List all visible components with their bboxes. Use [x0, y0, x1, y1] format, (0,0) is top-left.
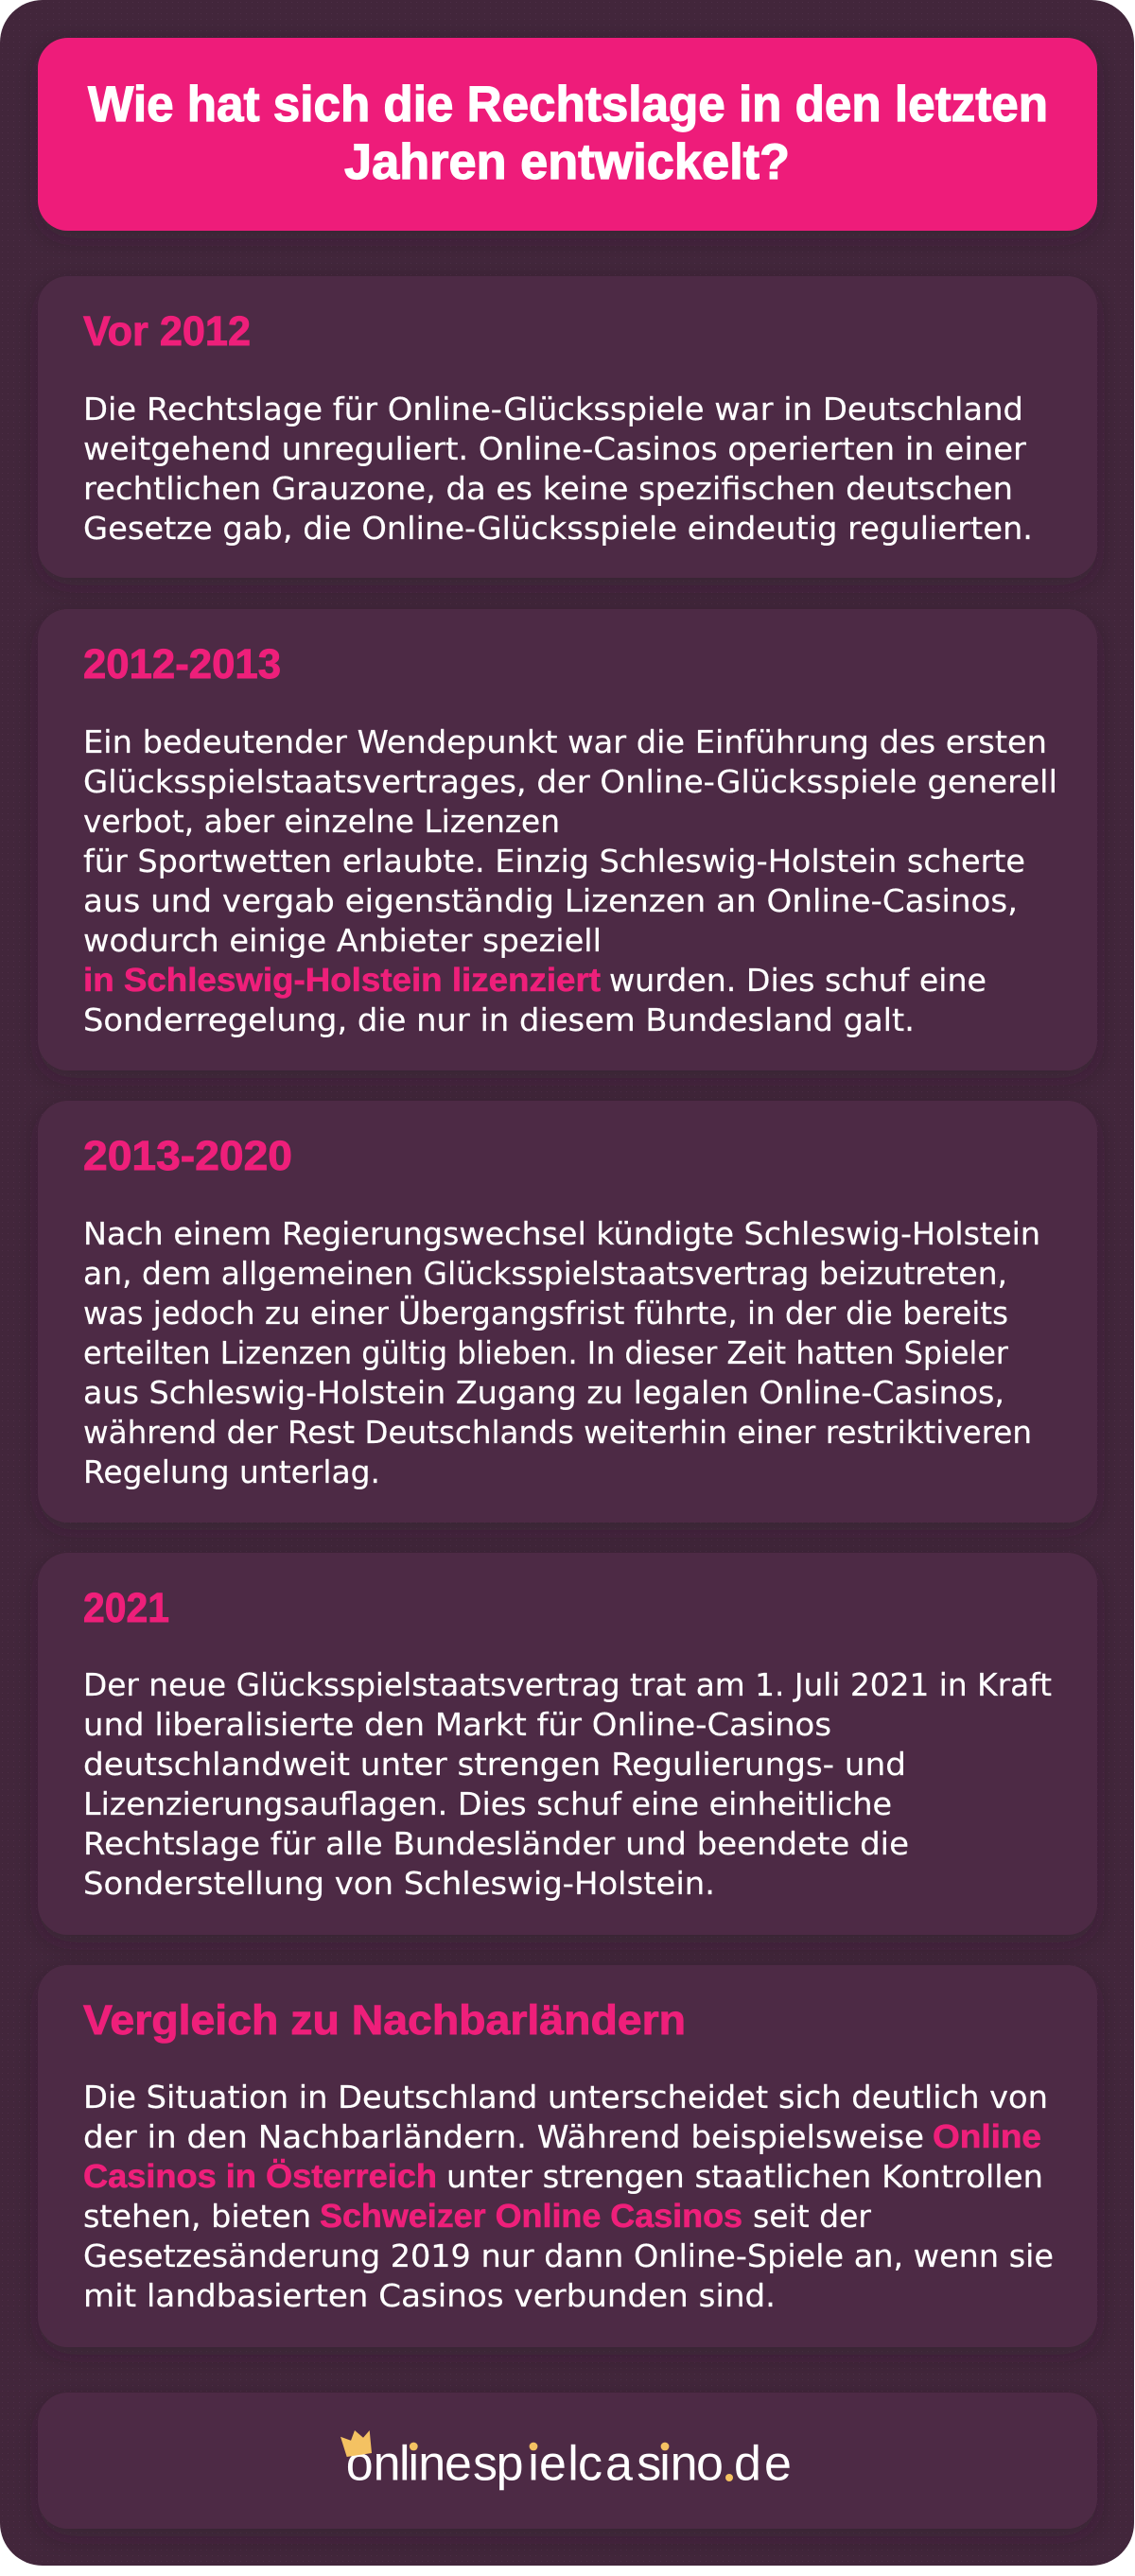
heading: Vergleich zu Nachbarländern: Vergleich zu Nachbarländern	[83, 1997, 686, 2044]
body text: 2013-2020	[83, 1215, 1040, 1490]
body text: Vor 2012: rechtlichen Grauzone, da es keine spezifischen deutschen	[83, 470, 1013, 507]
body text: 2012-2013	[83, 723, 1057, 1038]
title text: Jahren entwickelt?	[344, 134, 790, 190]
panel: 2012-2013	[38, 609, 1097, 1070]
body text: 2021: Sonderstellung von Schleswig-Holstein.	[83, 1865, 715, 1902]
body text: Vergleich zu Nachbarländern: Die Situation in Deutschland unterscheidet sich deutlich von	[83, 2079, 1048, 2115]
body text: 2012-2013: aus und vergab eigenständig Lizenzen an Online-Casinos,	[83, 882, 1018, 919]
body text: Vergleich zu Nachbarländern: unter strengen staatlichen Kontrollen	[446, 2158, 1043, 2195]
body text: Vergleich zu Nachbarländern: Gesetzesänderung 2019 nur dann Online-Spiele an, wenn sie	[83, 2237, 1054, 2274]
body text: Vergleich zu Nachbarländern: stehen, bieten	[83, 2198, 311, 2235]
heading: 2013-2020: 2013-2020	[83, 1133, 292, 1179]
body text: 2013-2020: an, dem allgemeinen Glücksspielstaatsvertrag beizutreten,	[83, 1255, 1007, 1292]
heading: Vor 2012: Vor 2012	[83, 308, 251, 355]
body text: 2013-2020: was jedoch zu einer Übergangsfrist führte, in der die bereits	[83, 1295, 1008, 1332]
title banner	[38, 38, 1097, 231]
title text: Wie hat sich die Rechtslage in den letzten	[88, 77, 1048, 132]
body text: 2012-2013: für Sportwetten erlaubte. Einzig Schleswig-Holstein scherte	[83, 843, 1025, 879]
body text: Vergleich zu Nachbarländern	[83, 2079, 1054, 2314]
body text: 2021: deutschlandweit unter strengen Regulierungs- und	[83, 1746, 906, 1783]
body text: 2021: Lizenzierungsauflagen. Dies schuf eine einheitliche	[83, 1785, 892, 1822]
body text: Vor 2012	[83, 391, 1033, 547]
body text: 2013-2020: während der Rest Deutschlands weiterhin einer restriktiveren	[83, 1414, 1032, 1451]
body text: 2012-2013: Sonderregelung, die nur in diesem Bundesland galt.	[83, 1001, 915, 1038]
body text: 2021	[83, 1666, 1052, 1902]
body text: 2012-2013: in Schleswig-Holstein lizenziert	[83, 962, 601, 999]
title text	[88, 77, 1048, 190]
panel: 2021	[38, 1553, 1097, 1935]
body text: Vor 2012: Gesetze gab, die Online-Glücksspiele eindeutig regulierten.	[83, 510, 1033, 547]
heading: 2021: 2021	[83, 1585, 169, 1631]
body text: Vergleich zu Nachbarländern: mit landbasierten Casinos verbunden sind.	[83, 2277, 776, 2314]
body text: 2012-2013: wurden. Dies schuf eine	[609, 962, 987, 999]
logo wordmark: onlinespielcasino.de	[346, 2436, 792, 2491]
panel: logo footer	[38, 2393, 1097, 2529]
body text: 2013-2020: aus Schleswig-Holstein Zugang zu legalen Online-Casinos,	[83, 1374, 1004, 1411]
body text: Vergleich zu Nachbarländern: seit der	[753, 2198, 871, 2235]
body text: Vergleich zu Nachbarländern: Schweizer Online Casinos	[320, 2198, 742, 2235]
panel: Vor 2012	[38, 276, 1097, 578]
body text: 2021: Rechtslage für alle Bundesländer und beendete die	[83, 1825, 909, 1862]
body text: Vor 2012: weitgehend unreguliert. Online-Casinos operierten in einer	[83, 430, 1026, 467]
body text: 2012-2013: verbot, aber einzelne Lizenzen	[83, 803, 560, 840]
body text: Vergleich zu Nachbarländern: Online	[933, 2118, 1041, 2155]
panel: 2013-2020	[38, 1101, 1097, 1523]
body text: 2012-2013: wodurch einige Anbieter speziell	[83, 922, 602, 959]
body text: 2013-2020: Regelung unterlag.	[83, 1453, 380, 1490]
panel: Vergleich zu Nachbarländern	[38, 1965, 1097, 2347]
body text: Vergleich zu Nachbarländern: der in den Nachbarländern. Während beispielsweise	[83, 2118, 924, 2155]
body text: 2021: und liberalisierte den Markt für Online-Casinos	[83, 1706, 831, 1743]
body text: 2021: Der neue Glücksspielstaatsvertrag trat am 1. Juli 2021 in Kraft	[83, 1666, 1052, 1703]
body text: Vor 2012: Die Rechtslage für Online-Glücksspiele war in Deutschland	[83, 391, 1023, 427]
body text: Vergleich zu Nachbarländern: Casinos in Österreich	[83, 2158, 437, 2195]
body text: 2013-2020: erteilten Lizenzen gültig blieben. In dieser Zeit hatten Spieler	[83, 1334, 1008, 1371]
icon: crown	[340, 2430, 372, 2457]
body text: 2013-2020: Nach einem Regierungswechsel kündigte Schleswig-Holstein	[83, 1215, 1040, 1252]
heading: 2012-2013: 2012-2013	[83, 641, 281, 688]
body text: 2012-2013: Glücksspielstaatsvertrages, der Online-Glücksspiele generell	[83, 763, 1057, 800]
body text: 2012-2013: Ein bedeutender Wendepunkt war die Einführung des ersten	[83, 723, 1047, 760]
